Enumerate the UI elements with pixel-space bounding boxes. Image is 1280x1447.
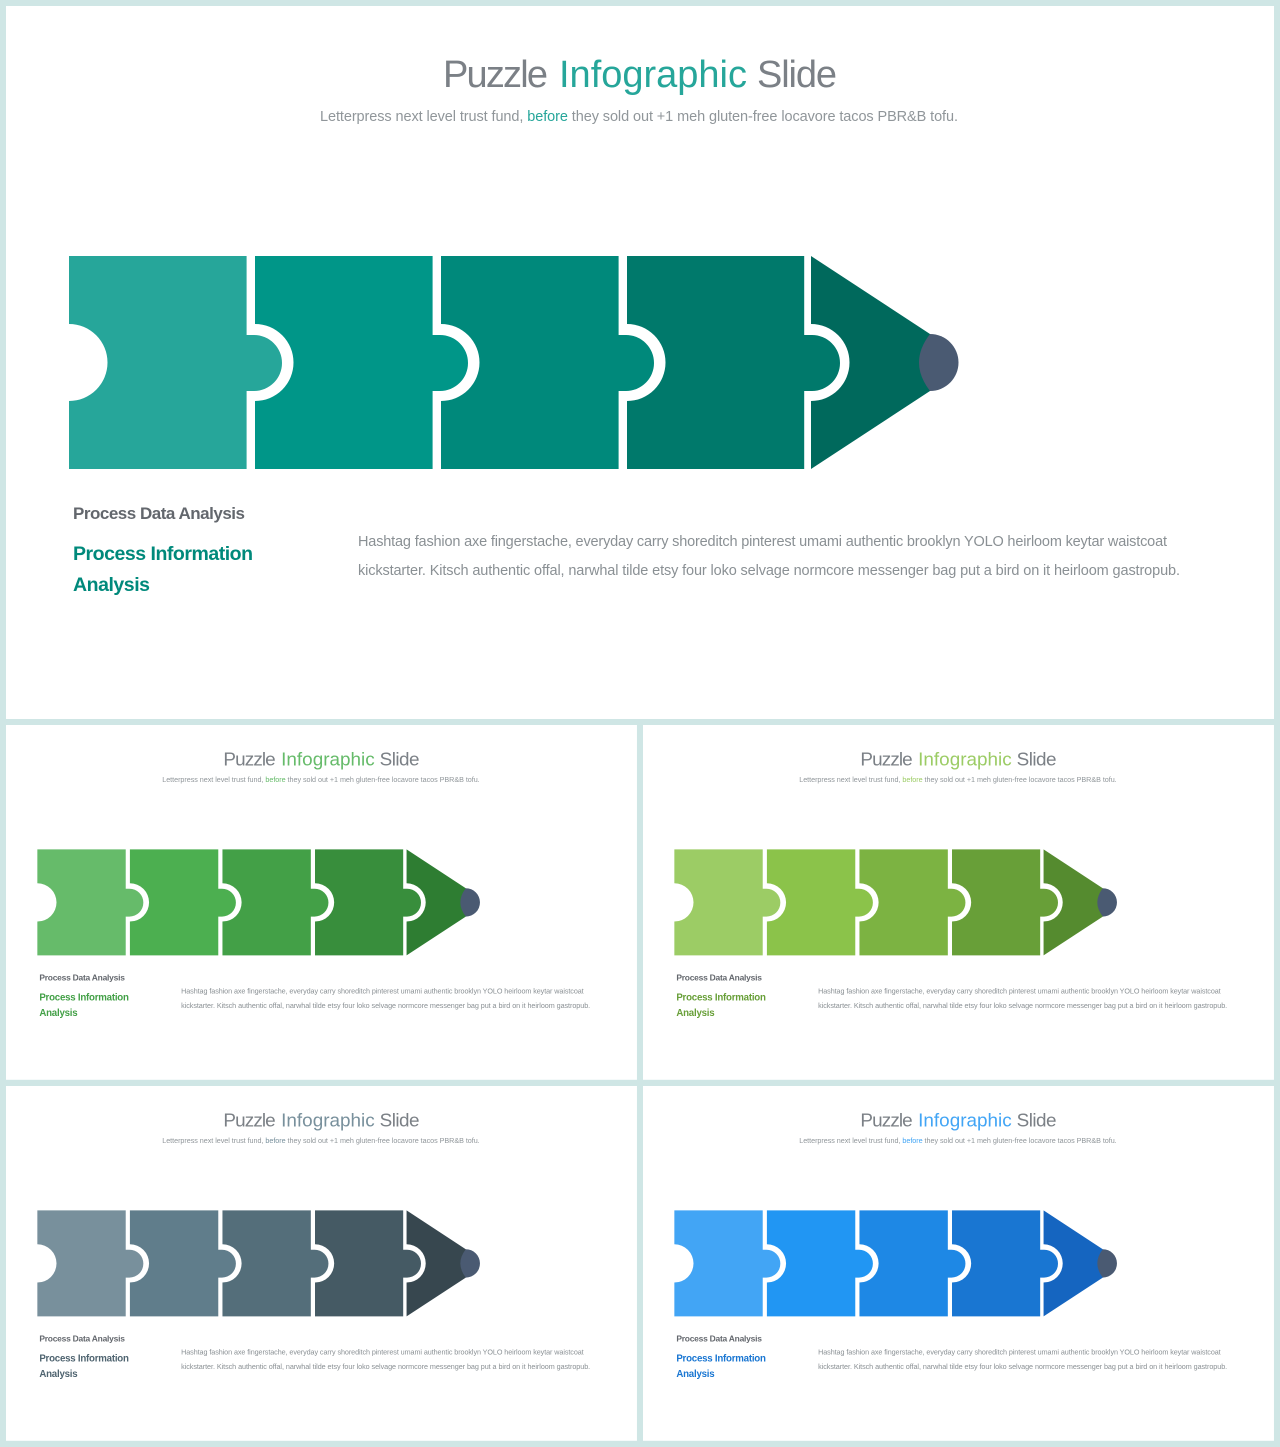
title: Infographic — [559, 54, 747, 96]
title — [860, 749, 1057, 770]
body text: kickstarter. Kitsch authentic offal, narwhal tilde etsy four loko selvage normcore messenger bag put a bird on it heirloom gastropub. — [818, 1362, 1227, 1371]
heading: process information analysis: Analysis — [676, 1008, 715, 1019]
subtitle: Letterpress next level trust fund, before they sold out +1 meh gluten-free locavore tacos PBR&B tofu. — [162, 1136, 480, 1145]
heading: process information analysis — [39, 1354, 129, 1380]
puzzle piece 4 — [315, 849, 421, 955]
pencil point — [919, 334, 959, 391]
puzzle piece 3 — [222, 849, 328, 955]
puzzle pencil chart — [674, 849, 1117, 955]
puzzle piece 2 — [130, 849, 236, 955]
body text: kickstarter. Kitsch authentic offal, narwhal tilde etsy four loko selvage normcore messenger bag put a bird on it heirloom gastropub. — [358, 563, 1180, 579]
title: Puzzle — [860, 1110, 913, 1131]
pencil tip — [1044, 1210, 1103, 1316]
heading: process information analysis: Process Information — [676, 1354, 766, 1365]
title: Infographic — [281, 1110, 375, 1131]
title: Slide — [1017, 749, 1057, 770]
puzzle piece 3 — [441, 256, 654, 469]
subtitle: Letterpress next level trust fund, before they sold out +1 meh gluten-free locavore tacos PBR&B tofu. — [320, 109, 958, 125]
heading: process information analysis: Process Information — [676, 993, 766, 1004]
heading: process information analysis: Process Information — [39, 993, 129, 1004]
heading: process information analysis — [73, 543, 253, 596]
body text: kickstarter. Kitsch authentic offal, narwhal tilde etsy four loko selvage normcore messenger bag put a bird on it heirloom gastropub. — [181, 1362, 590, 1371]
title: Slide — [380, 1110, 420, 1131]
heading: process information analysis: Analysis — [39, 1008, 78, 1019]
panel background — [6, 725, 637, 1080]
title — [223, 749, 420, 770]
puzzle pencil chart — [69, 256, 959, 469]
slide: blue — [643, 1086, 1274, 1441]
puzzle pencil chart — [37, 1210, 480, 1316]
body text: kickstarter. Kitsch authentic offal, narwhal tilde etsy four loko selvage normcore messenger bag put a bird on it heirloom gastropub. — [181, 1001, 590, 1010]
heading: process information analysis: Process Information — [73, 543, 253, 565]
slide: slate — [6, 1086, 637, 1441]
heading: process information analysis: Analysis — [73, 574, 150, 596]
body text: kickstarter. Kitsch authentic offal, narwhal tilde etsy four loko selvage normcore messenger bag put a bird on it heirloom gastropub. — [818, 1001, 1227, 1010]
panel background — [6, 1086, 637, 1441]
heading: process information analysis: Analysis — [676, 1369, 715, 1380]
title: Puzzle — [223, 1110, 276, 1131]
puzzle piece 3 — [222, 1210, 328, 1316]
title: Slide — [1017, 1110, 1057, 1131]
body text: Hashtag fashion axe fingerstache, everyday carry shoreditch pinterest umami authentic brooklyn YOLO heirloom keytar waistcoat — [358, 534, 1167, 550]
heading: process data analysis: Process Data Analysis — [39, 972, 125, 982]
heading: process data analysis: Process Data Analysis — [676, 972, 762, 982]
title: Puzzle — [860, 749, 913, 770]
title — [223, 1110, 420, 1131]
title: Puzzle — [223, 749, 276, 770]
heading: process data analysis: Process Data Analysis — [676, 1333, 762, 1343]
pencil tip — [407, 1210, 466, 1316]
title: Infographic — [918, 749, 1012, 770]
pencil point — [1097, 888, 1117, 917]
puzzle piece 4 — [952, 1210, 1058, 1316]
puzzle piece 4 — [315, 1210, 421, 1316]
puzzle piece 1 — [69, 256, 282, 469]
body text — [181, 1348, 590, 1371]
title: Infographic — [918, 1110, 1012, 1131]
puzzle piece 3 — [859, 1210, 965, 1316]
puzzle piece 2 — [130, 1210, 236, 1316]
slide: teal (large) — [6, 6, 1274, 719]
body text — [358, 534, 1180, 579]
pencil point — [460, 888, 480, 917]
body text: Hashtag fashion axe fingerstache, everyday carry shoreditch pinterest umami authentic brooklyn YOLO heirloom keytar waistcoat — [181, 987, 584, 996]
puzzle pencil chart — [674, 1210, 1117, 1316]
subtitle: Letterpress next level trust fund, before they sold out +1 meh gluten-free locavore tacos PBR&B tofu. — [799, 1136, 1117, 1145]
title — [443, 54, 837, 96]
title: Slide — [380, 749, 420, 770]
title: Slide — [757, 54, 837, 96]
puzzle piece 4 — [627, 256, 840, 469]
heading: process information analysis — [676, 1354, 766, 1380]
heading: process information analysis: Process Information — [39, 1354, 129, 1365]
puzzle piece 4 — [952, 849, 1058, 955]
subtitle: Letterpress next level trust fund, before they sold out +1 meh gluten-free locavore tacos PBR&B tofu. — [799, 775, 1117, 784]
heading: process data analysis: Process Data Analysis — [39, 1333, 125, 1343]
heading: process information analysis — [39, 993, 129, 1019]
puzzle piece 1 — [37, 1210, 143, 1316]
pencil tip — [407, 849, 466, 955]
body text — [818, 987, 1227, 1010]
puzzle piece 2 — [767, 849, 873, 955]
subtitle: Letterpress next level trust fund, before they sold out +1 meh gluten-free locavore tacos PBR&B tofu. — [162, 775, 480, 784]
pencil point — [1097, 1249, 1117, 1278]
puzzle pencil chart — [37, 849, 480, 955]
title: Puzzle — [443, 54, 548, 96]
slide: light green — [643, 725, 1274, 1080]
panel background — [6, 6, 1274, 719]
body text — [818, 1348, 1227, 1371]
body text: Hashtag fashion axe fingerstache, everyday carry shoreditch pinterest umami authentic brooklyn YOLO heirloom keytar waistcoat — [818, 987, 1221, 996]
pencil tip — [1044, 849, 1103, 955]
title: Infographic — [281, 749, 375, 770]
panel background — [643, 1086, 1274, 1441]
title — [860, 1110, 1057, 1131]
pencil point — [460, 1249, 480, 1278]
heading: process information analysis — [676, 993, 766, 1019]
body text: Hashtag fashion axe fingerstache, everyday carry shoreditch pinterest umami authentic brooklyn YOLO heirloom keytar waistcoat — [181, 1348, 584, 1357]
panel background — [643, 725, 1274, 1080]
slide: green — [6, 725, 637, 1080]
body text: Hashtag fashion axe fingerstache, everyday carry shoreditch pinterest umami authentic brooklyn YOLO heirloom keytar waistcoat — [818, 1348, 1221, 1357]
puzzle piece 3 — [859, 849, 965, 955]
puzzle piece 1 — [674, 849, 780, 955]
body text — [181, 987, 590, 1010]
puzzle piece 2 — [767, 1210, 873, 1316]
pencil tip — [811, 256, 930, 469]
heading: process information analysis: Analysis — [39, 1369, 78, 1380]
puzzle piece 1 — [37, 849, 143, 955]
puzzle piece 1 — [674, 1210, 780, 1316]
puzzle piece 2 — [255, 256, 468, 469]
heading: process data analysis: Process Data Analysis — [73, 504, 245, 523]
